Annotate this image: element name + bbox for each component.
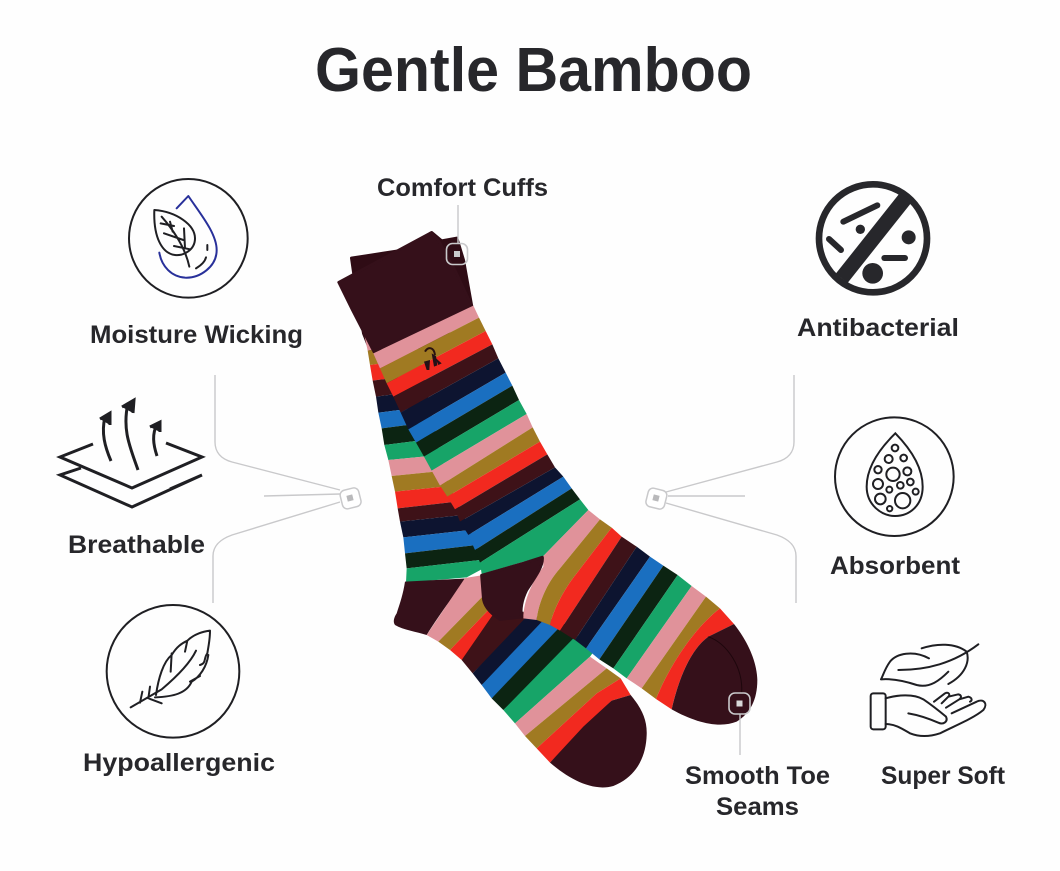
marker: comfort cuffs [446,205,468,264]
sock illustration [339,232,757,787]
label: hypoallergenic: Hypoallergenic [83,749,275,777]
icon: moisture wicking [129,179,248,298]
marker: smooth toe seams [729,693,750,755]
title: Gentle Bamboo [315,36,752,105]
icon: breathable [60,400,202,507]
connector lines: right group [645,375,796,603]
label: smooth toe seams: Seams [716,793,799,821]
back sock [351,232,647,787]
label: comfort cuffs: Comfort Cuffs [377,174,548,202]
icon: hypoallergenic [107,605,239,738]
label: smooth toe seams: Smooth Toe [685,762,830,790]
connector lines: left group [213,375,362,603]
icon: absorbent [835,417,954,536]
label: antibacterial: Antibacterial [797,314,959,342]
label: moisture wicking: Moisture Wicking [90,321,303,349]
label: smooth toe seams [685,762,830,821]
label: breathable: Breathable [68,531,205,559]
front sock [339,233,757,725]
label: absorbent: Absorbent [830,552,961,580]
logo on sock [424,348,442,370]
icon: antibacterial [819,184,927,292]
icon: super soft [871,644,985,736]
label: super soft: Super Soft [881,762,1006,790]
